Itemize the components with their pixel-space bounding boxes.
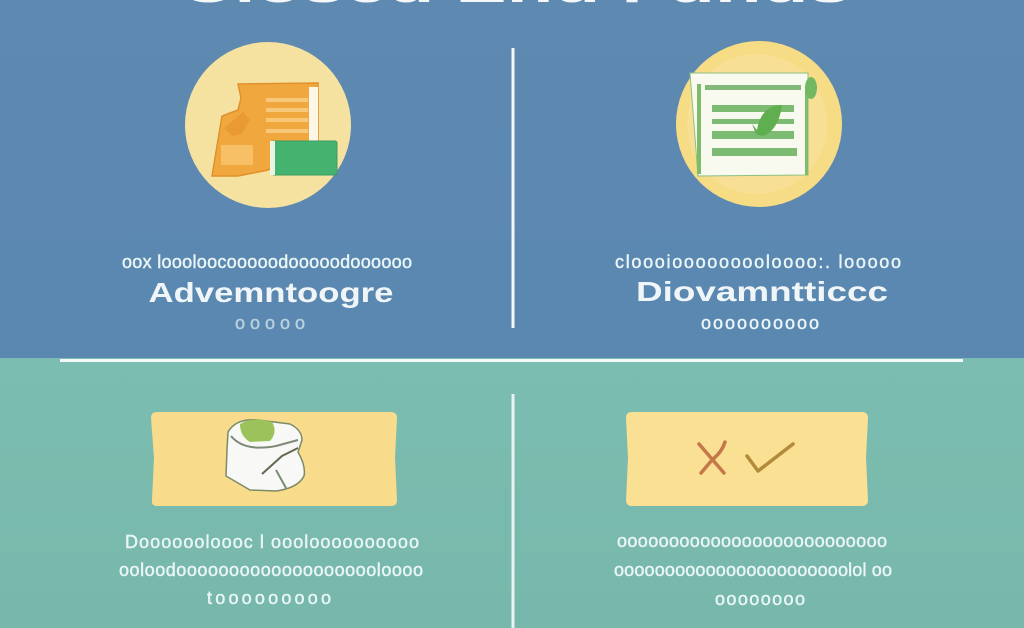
- panel: blue top background: [0, 0, 1024, 358]
- panel: teal bottom background: [0, 358, 1024, 628]
- vertical divider: bottom: [512, 394, 514, 628]
- horizontal divider: [60, 359, 963, 362]
- text block: bottom left line 3: tooooooooo: [207, 588, 331, 608]
- text block: disadvantage intro line: cloooiooooooooloooo:. looooo: [615, 252, 901, 272]
- icon: white wrapped bundle: [226, 419, 304, 491]
- panel: right yellow banner: [626, 412, 868, 506]
- icon: cross mark: [699, 442, 725, 473]
- icon: checklist document on yellow circle: [676, 41, 842, 207]
- text block: advantage closing line: ooooo: [235, 313, 305, 333]
- text block: disadvantage closing line: oooooooooo: [701, 313, 819, 333]
- text block: bottom right line 3: oooooooo: [715, 589, 805, 609]
- vertical divider: top: [512, 48, 514, 328]
- heading: disadvantage: Diovamntticcc: [636, 276, 888, 307]
- text block: bottom right line 2: ooooooooooooooooooooooolol oo: [614, 560, 892, 580]
- text block: advantage intro line: oox loooloocooooodooooodoooooo: [122, 252, 412, 272]
- text block: bottom left line 2: ooloodoooooooooooooooooooloooo: [119, 560, 423, 580]
- icon: check mark: [747, 444, 793, 471]
- text block: bottom right line 1: oooooooooooooooooooooooooo: [617, 531, 887, 551]
- panel: left yellow banner: [151, 412, 397, 506]
- heading: advantage: Advemntoogre: [148, 277, 394, 308]
- text block: bottom left line 1: Dooooooloooc l oooloooooooooo: [125, 532, 419, 552]
- icon: documents on yellow circle: [185, 42, 351, 208]
